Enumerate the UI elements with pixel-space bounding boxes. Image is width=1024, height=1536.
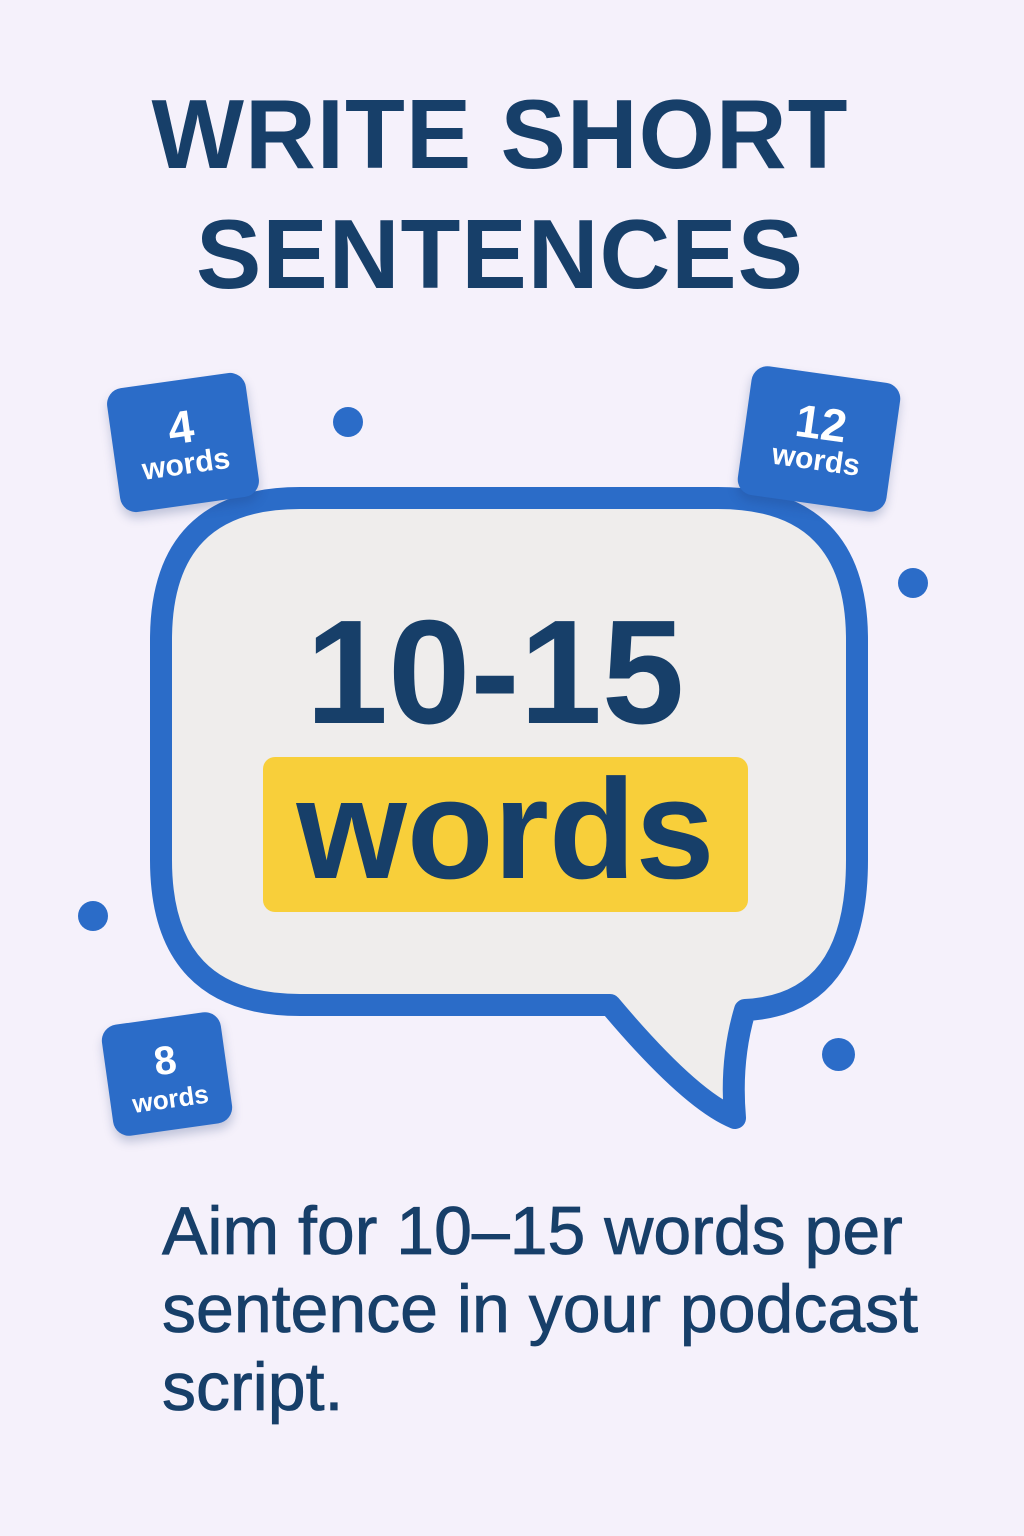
badge: 12 words: 12 <box>792 394 850 452</box>
title <box>152 79 848 309</box>
badge: 4 words <box>105 371 261 514</box>
badge: 8 words: words <box>130 1079 210 1119</box>
yellow words label: words <box>296 750 715 909</box>
badge: 4 words: 4 <box>165 400 197 455</box>
title: WRITE SHORT <box>152 79 848 189</box>
main number: 10-15 <box>306 590 684 755</box>
badge: 8 words: 8 <box>151 1038 179 1084</box>
badge: 12 words <box>736 364 902 514</box>
bottom text: Aim for 10–15 words per sentence in your podcast script. <box>162 1193 918 1425</box>
badge: 4 words: words <box>140 442 232 487</box>
dots <box>78 407 928 1071</box>
badge: 12 words: words <box>770 438 862 483</box>
title: SENTENCES <box>196 199 804 309</box>
badge: 8 words <box>100 1010 234 1138</box>
